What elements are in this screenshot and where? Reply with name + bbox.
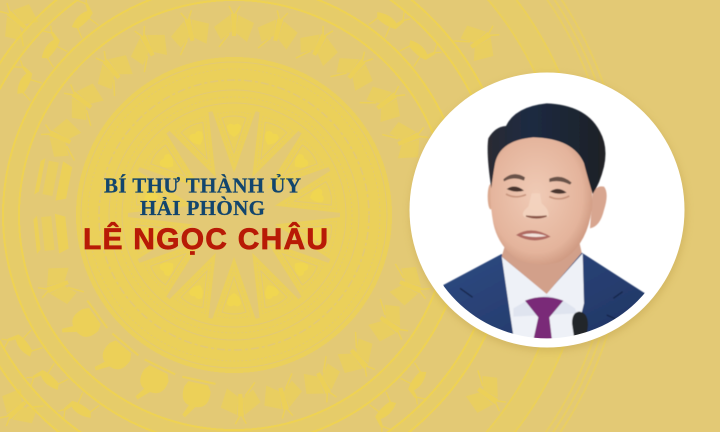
teeth [522,234,547,237]
tie [525,297,563,340]
title block [83,174,328,256]
nostrils [526,216,547,218]
heading: position: BÍ THƯ THÀNH ỦY [104,174,301,198]
bronze drum pattern [0,0,514,432]
white circle [410,72,684,348]
left ear [488,184,494,209]
microphone [572,312,588,337]
shirt collar shadow [513,295,577,317]
inner band lines [81,62,387,368]
left eye [507,187,524,192]
suit jacket [442,252,645,334]
portrait circle [410,72,686,360]
face [490,137,592,265]
right eyebrow [549,177,572,185]
heading: name: LÊ NGỌC CHÂU [83,222,328,256]
star rays [124,108,344,322]
mouth [516,230,551,240]
under-eye shading [506,194,569,199]
hair [488,103,605,194]
nose [523,193,549,219]
neck [502,230,582,294]
left eyebrow [503,174,525,181]
shirt [502,253,584,340]
right eye [550,189,567,194]
portrait illustration [443,103,645,360]
heading: city: HẢI PHÒNG [140,196,265,220]
bird and figure band [0,0,514,432]
circle soft shadow [410,75,686,351]
right ear [590,186,607,228]
lapel shadows [460,288,623,319]
